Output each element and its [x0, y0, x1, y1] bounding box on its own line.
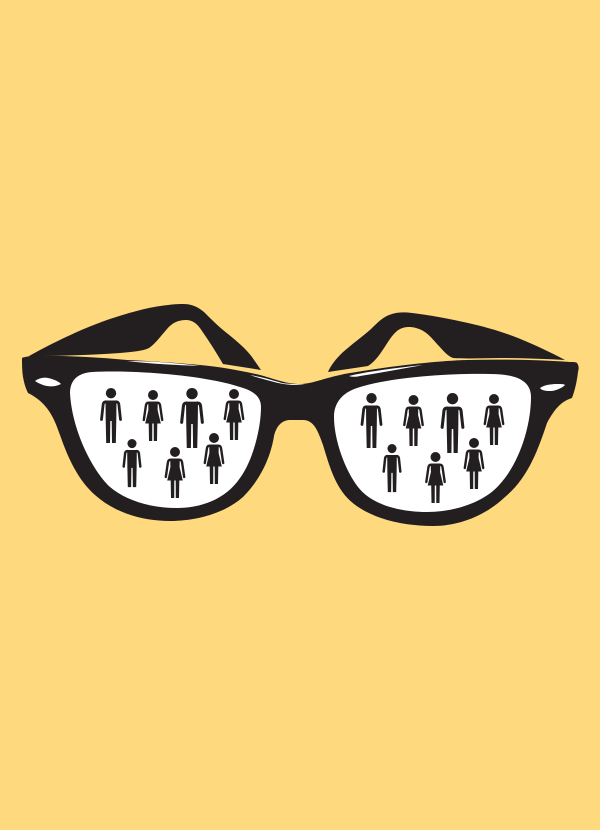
person	[404, 395, 423, 446]
person	[182, 388, 202, 448]
left glare	[127, 361, 200, 366]
left hinge highlight	[35, 378, 61, 386]
right glare	[349, 365, 423, 377]
right lens	[334, 374, 531, 512]
person	[102, 388, 120, 443]
right hinge highlight	[540, 384, 565, 391]
person	[124, 439, 140, 487]
bridge glare	[250, 375, 305, 385]
person	[205, 433, 223, 484]
person	[485, 394, 503, 445]
person	[144, 390, 162, 441]
glasses	[22, 304, 579, 526]
person	[166, 447, 184, 498]
left lens	[70, 372, 261, 508]
left temple arm	[29, 304, 261, 370]
frame	[22, 356, 579, 526]
person	[442, 393, 463, 453]
person	[465, 438, 483, 489]
person	[362, 393, 381, 448]
person	[225, 389, 243, 440]
person	[426, 452, 445, 503]
right temple arm	[328, 312, 565, 372]
right lens people	[362, 393, 503, 503]
person	[384, 444, 400, 492]
left lens people	[102, 388, 243, 498]
